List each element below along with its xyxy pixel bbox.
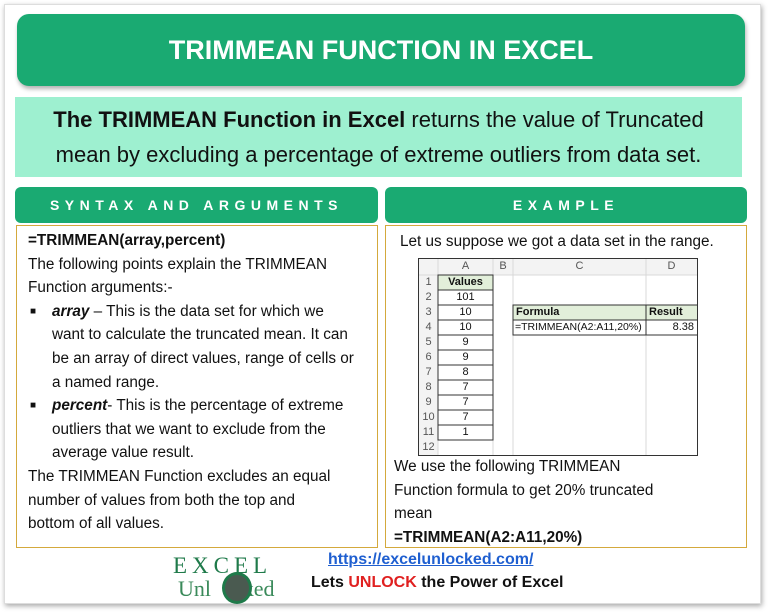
panel: example: We use the following TRIMMEAN (394, 458, 620, 475)
bullet: percent: average value result. (52, 444, 194, 461)
spreadsheet example (418, 258, 698, 456)
spreadsheet example: 8 (425, 381, 432, 393)
spreadsheet example: 7 (462, 381, 469, 393)
spreadsheet example: 1 (462, 426, 469, 438)
spreadsheet example: 10 (459, 306, 472, 318)
bullet: array: want to calculate the truncated mean. It can (52, 326, 348, 343)
bullet: array: be an array of direct values, range of cells or (52, 350, 354, 367)
spreadsheet example: 7 (425, 366, 432, 378)
intro text block (15, 97, 742, 177)
title (17, 14, 745, 86)
spreadsheet example: 12 (422, 441, 435, 453)
spreadsheet example: 5 (425, 336, 432, 348)
spreadsheet example: 6 (425, 351, 432, 363)
panel: example: Let us suppose we got a data set in the range. (400, 233, 714, 250)
spreadsheet example: Values (448, 276, 483, 288)
spreadsheet example: 2 (425, 291, 432, 303)
spreadsheet example: C (576, 260, 583, 272)
spreadsheet example: 10 (459, 321, 472, 333)
spreadsheet example: Result (649, 306, 683, 318)
icon: lock (222, 572, 252, 604)
spreadsheet example: 10 (422, 411, 435, 423)
panel: example: Function formula to get 20% truncated (394, 482, 653, 499)
panel: example: mean (394, 505, 432, 522)
spreadsheet example: 9 (462, 351, 469, 363)
spreadsheet example: 9 (462, 336, 469, 348)
logo: Excel Unlocked: EXCEL (173, 553, 272, 578)
bullet: percent: ■ (30, 400, 36, 411)
spreadsheet example: 7 (462, 396, 469, 408)
panel: example: =TRIMMEAN(A2:A11,20%) (394, 529, 582, 546)
bullet: percent: outliers that we want to exclude from the (52, 421, 326, 438)
intro text block: The TRIMMEAN Function in Excel returns the value of Truncated (53, 107, 704, 132)
panel: syntax: The following points explain the TRIMMEAN (28, 256, 327, 273)
intro text block: mean by excluding a percentage of extreme outliers from data set. (56, 142, 701, 167)
bullet: array (30, 303, 354, 391)
heading: syntax and arguments (15, 187, 378, 223)
spreadsheet example: 7 (462, 411, 469, 423)
spreadsheet example: 3 (425, 306, 432, 318)
spreadsheet example: A (462, 260, 469, 272)
heading: example (385, 187, 747, 223)
panel: example (385, 225, 747, 548)
spreadsheet example: D (668, 260, 675, 272)
logo: Excel Unlocked: Unl cked (178, 576, 275, 601)
title: TRIMMEAN FUNCTION IN EXCEL (169, 35, 593, 65)
heading: example: EXAMPLE (513, 197, 619, 213)
spreadsheet example: 11 (423, 426, 434, 438)
panel: syntax: Function arguments:- The TRIMMEAN Function excludes an equal (28, 279, 330, 485)
tagline: Lets UNLOCK the Power of Excel (311, 574, 564, 591)
spreadsheet example: 8.38 (673, 321, 694, 333)
panel: syntax: =TRIMMEAN(array,percent) (28, 232, 225, 249)
bullet: percent: percent- This is the percentage of extreme (52, 397, 343, 414)
panel: syntax (16, 225, 378, 548)
spreadsheet example: 9 (425, 396, 432, 408)
panel: syntax: number of values from both the top and (28, 492, 295, 509)
spreadsheet example: 101 (456, 291, 475, 303)
bullet: array: ■ (30, 306, 36, 317)
spreadsheet example: B (499, 260, 507, 272)
website link: https://excelunlocked.com/ (328, 551, 533, 568)
bullet: array: a named range. (52, 374, 159, 391)
logo: Excel Unlocked (173, 553, 275, 604)
heading: syntax and arguments: SYNTAX AND ARGUMENTS (50, 197, 343, 213)
spreadsheet example: 8 (462, 366, 469, 378)
panel: syntax: bottom of all values. (28, 515, 164, 532)
spreadsheet example: Formula (516, 306, 559, 318)
spreadsheet example: 4 (425, 321, 432, 333)
bullet: array: array – This is the data set for which we (52, 303, 324, 320)
spreadsheet example: 1 (425, 276, 432, 288)
bullet: percent (30, 397, 343, 461)
spreadsheet example: =TRIMMEAN(A2:A11,20%) (515, 321, 642, 333)
